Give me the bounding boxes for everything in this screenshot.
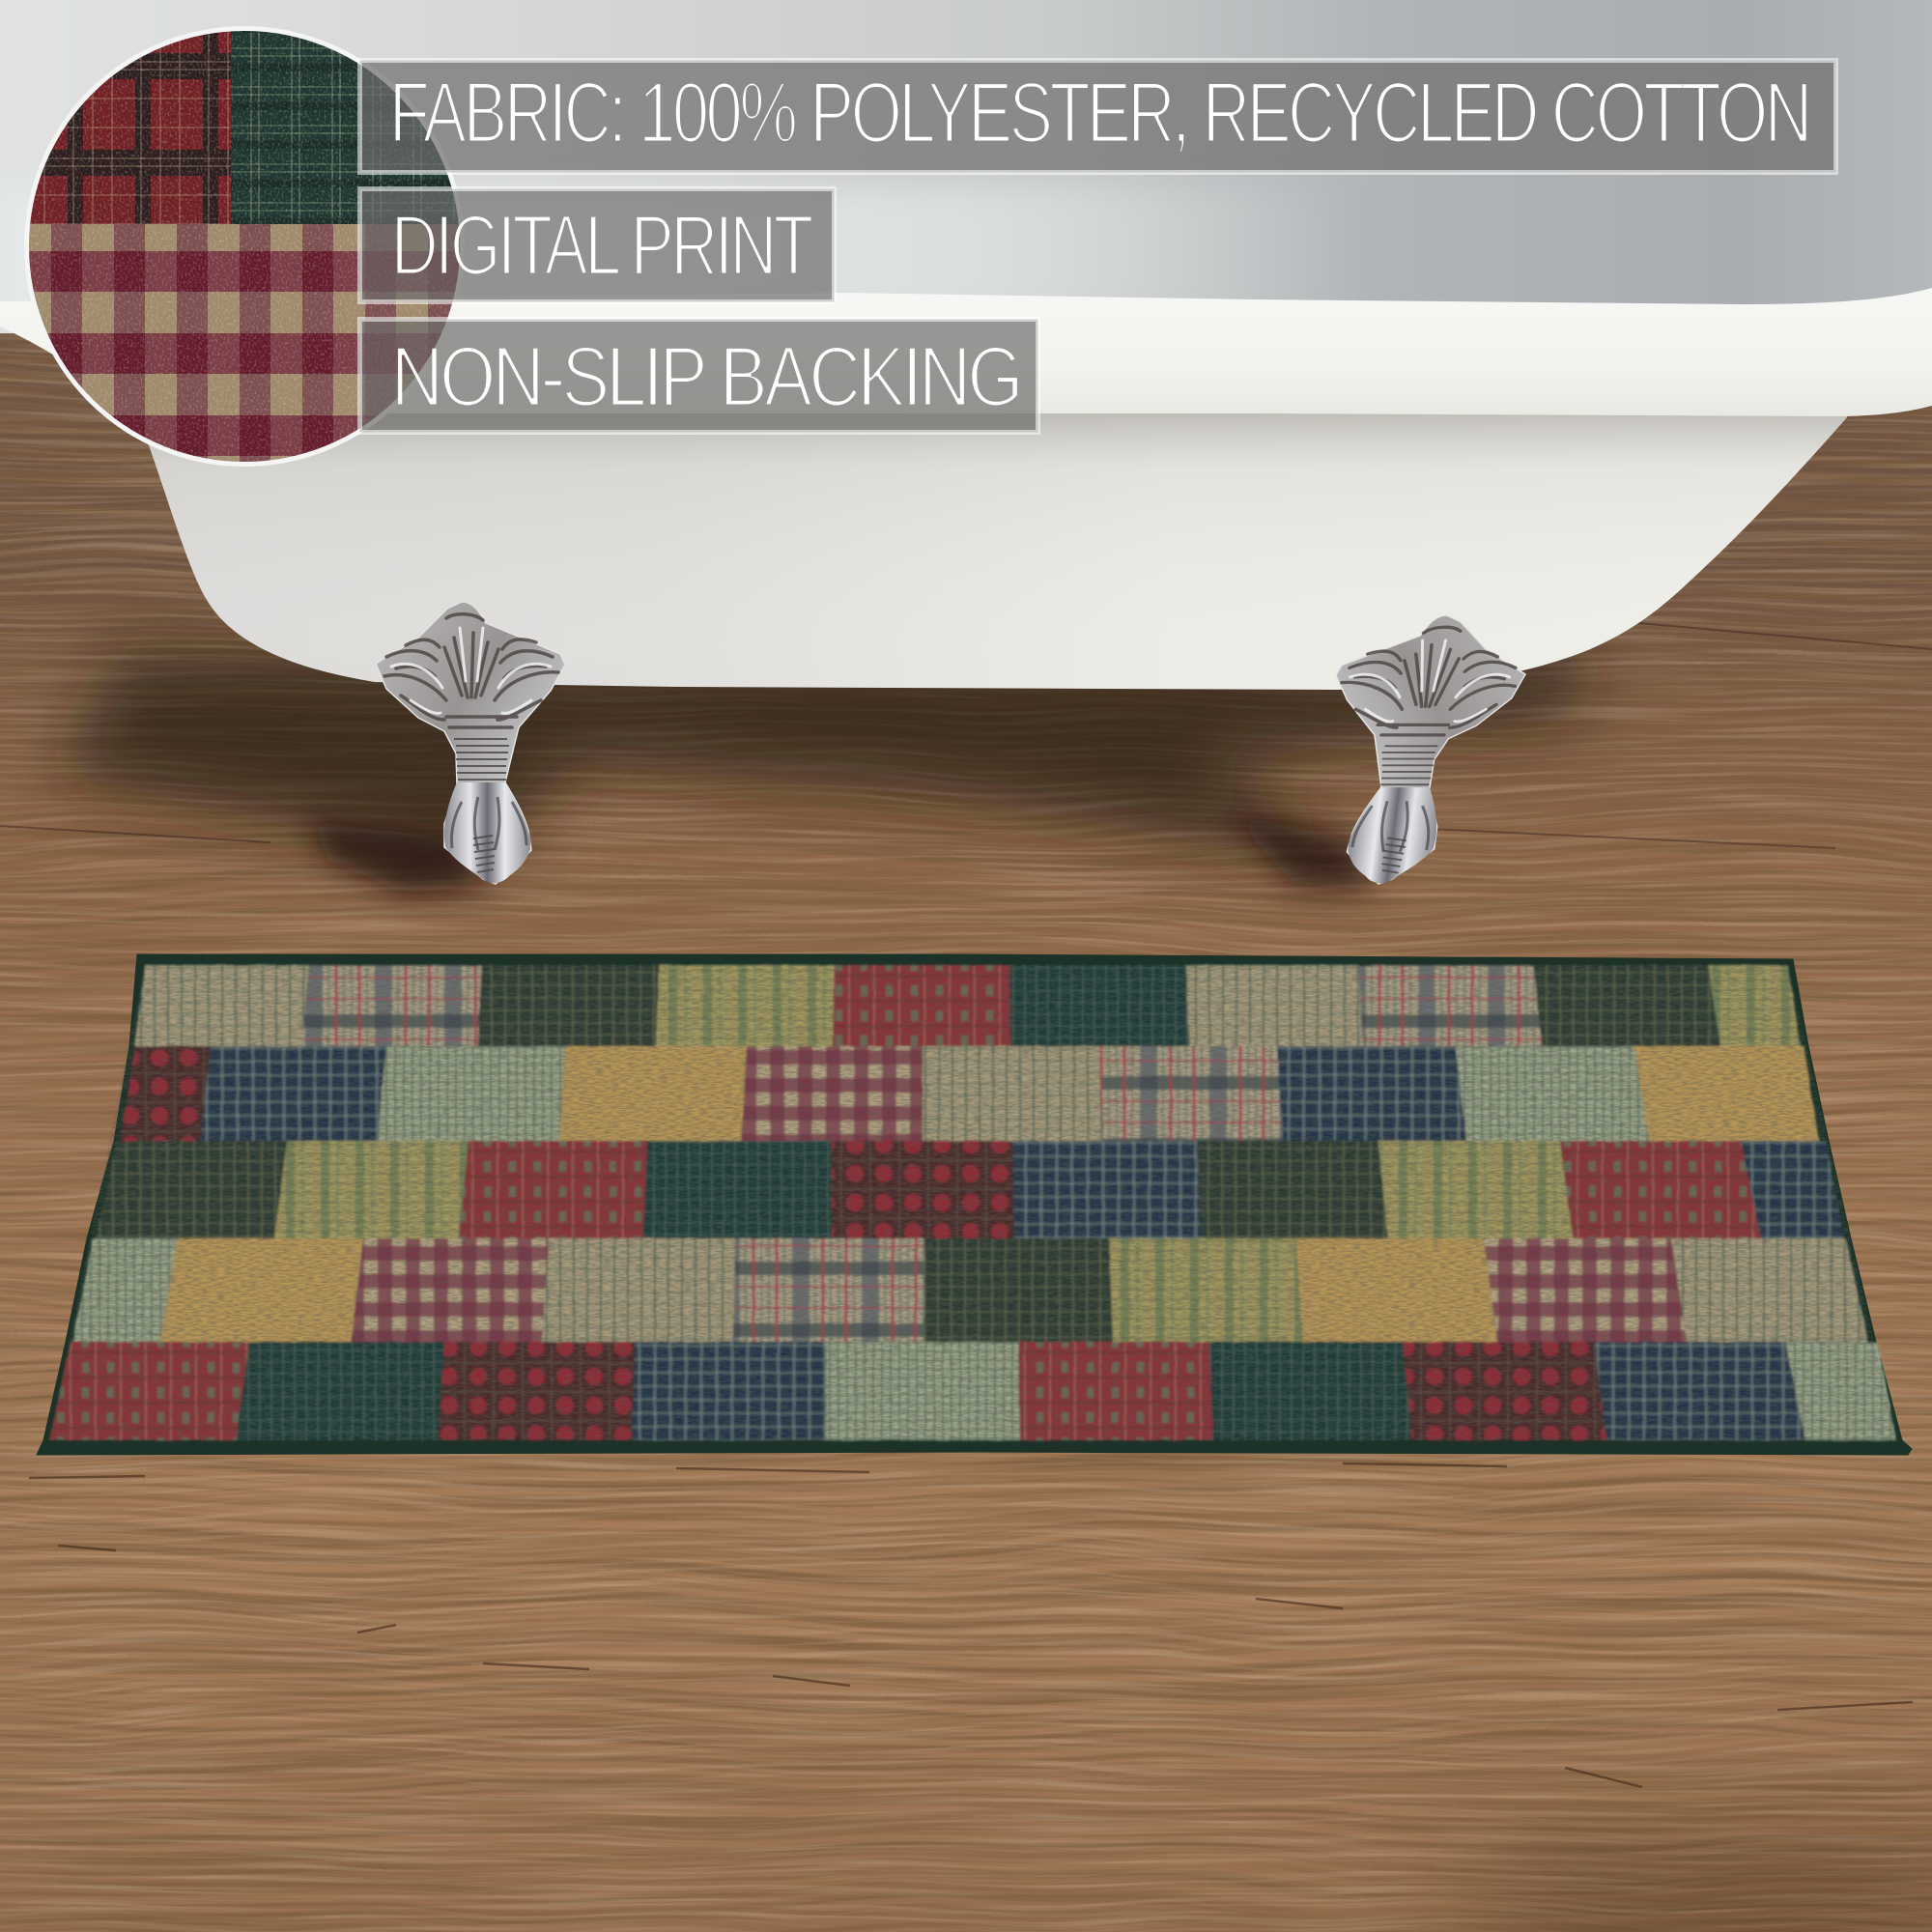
mat row 3 [96,1141,1844,1238]
tub rim [0,288,1932,416]
swatch: red plaid [30,31,231,224]
bath mat [37,954,1912,1455]
mat row 1 [134,965,1801,1046]
mat patches [49,965,1896,1440]
mat row 5 [49,1342,1896,1440]
swatch: burgundy gingham [29,224,460,462]
swatch: dark green plaid [231,31,459,224]
icon: left claw foot [376,602,565,884]
tub wall [0,0,1932,333]
label: digital print: DIGITAL PRINT [391,197,812,293]
foot shadows [309,811,1372,894]
mat row 2 [120,1046,1819,1141]
mat border [37,954,1912,1455]
fabric swatch circle [19,19,473,483]
label: non-slip backing: NON-SLIP BACKING [391,328,1020,424]
tub body [149,406,1847,690]
label: digital print [359,189,835,301]
shadow under tub [58,647,1594,874]
icon: right claw foot [1309,615,1533,884]
swatch ring [27,29,462,464]
mat row 4 [72,1238,1868,1342]
